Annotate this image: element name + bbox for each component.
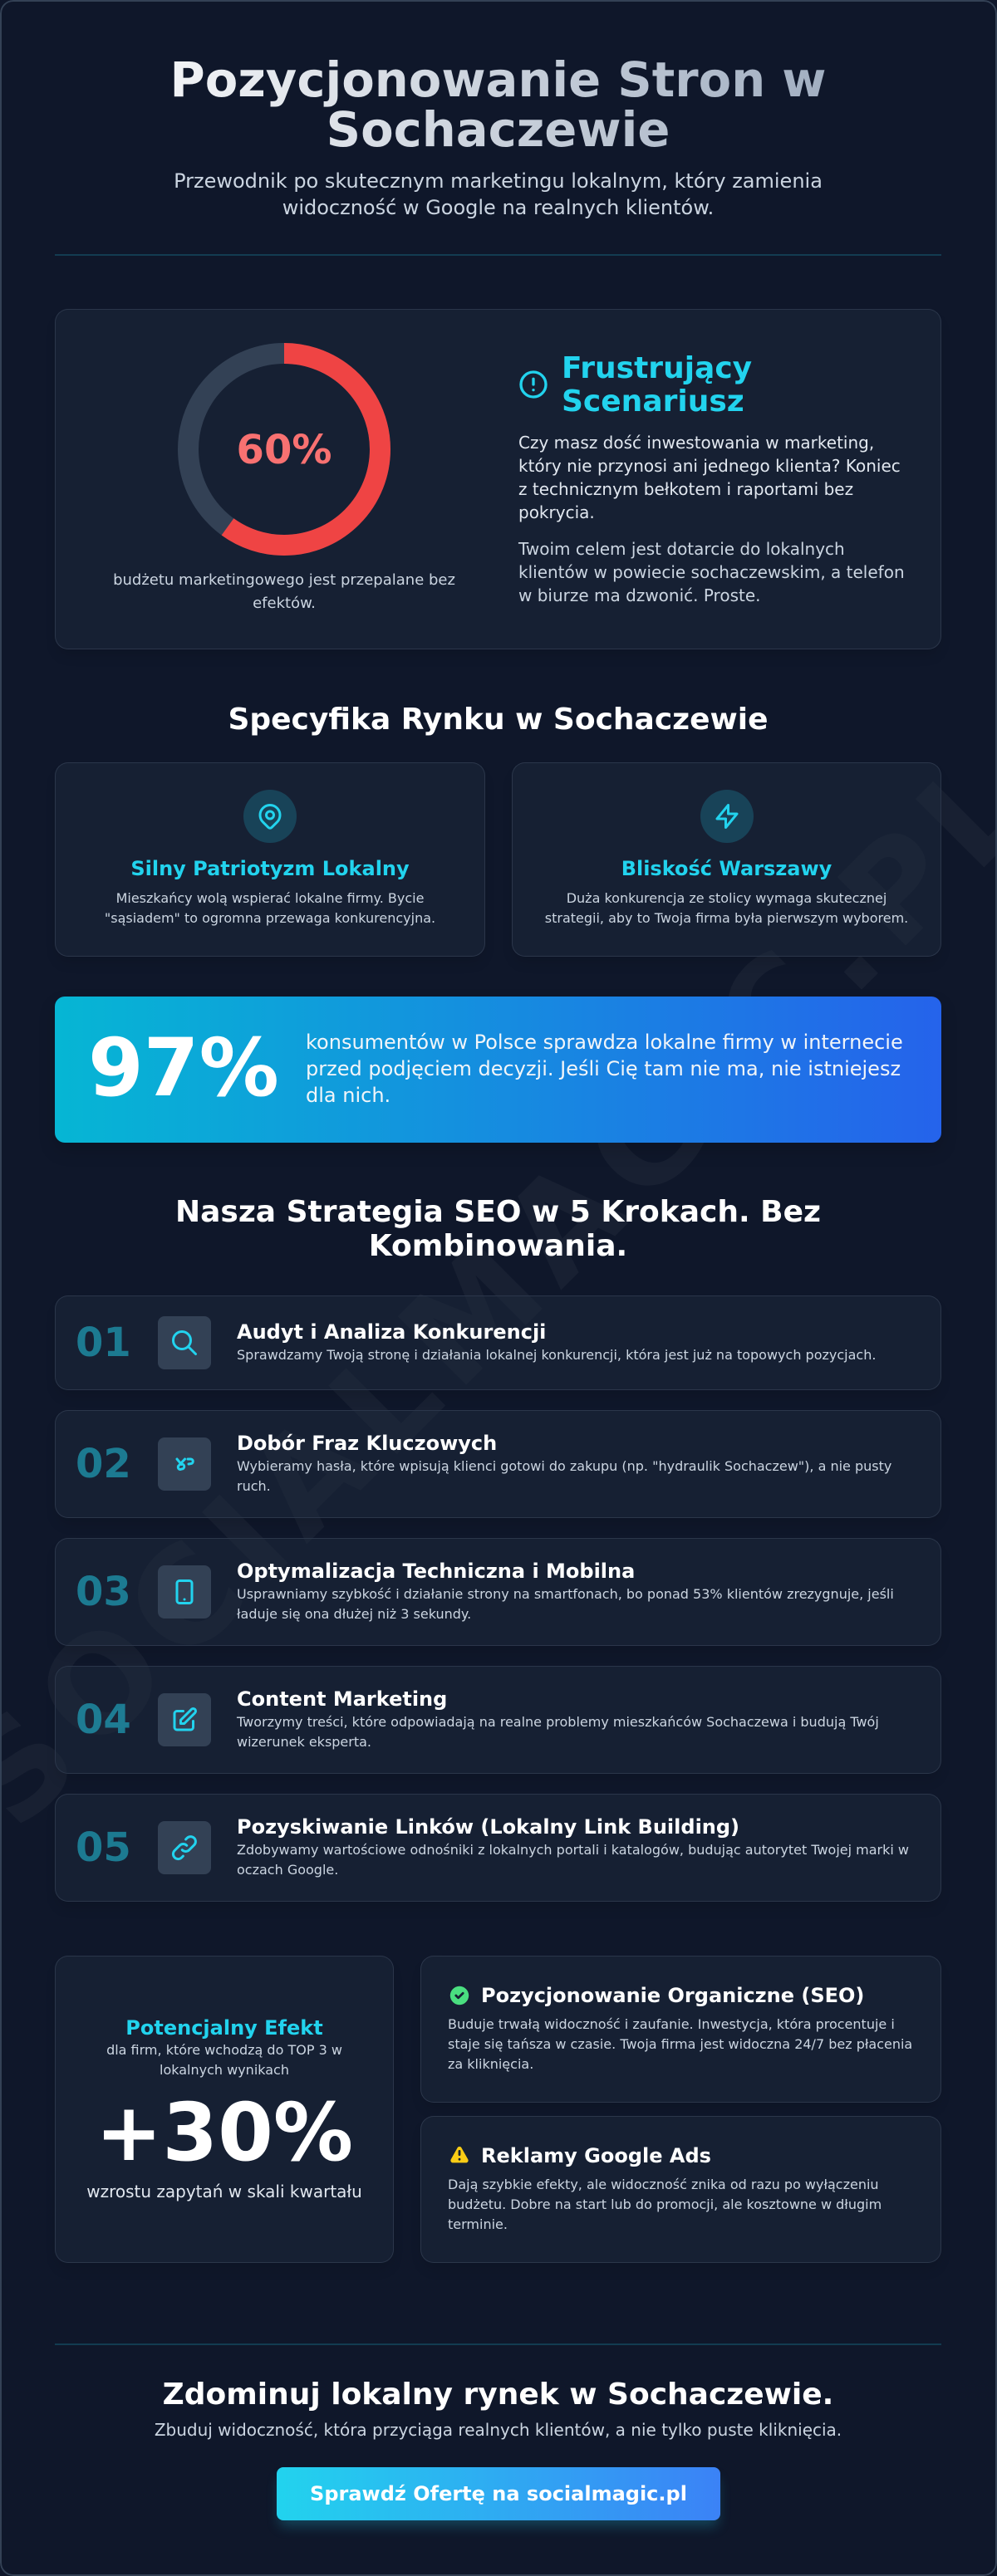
icon: mobile device — [158, 1565, 211, 1619]
paragraph one: który nie przynosi ani jednego klienta? Koniec — [518, 456, 901, 476]
subtitle: widoczność w Google na realnych klientów. — [282, 196, 714, 219]
step text: Wybieramy hasła, które wpisują klienci gotowi do zakupu (np. "hydraulik Sochaczew"), a nie pusty — [237, 1458, 891, 1474]
step text — [237, 1842, 909, 1878]
paragraph two: klientów w powiecie sochaczewskim, a telefon — [518, 562, 905, 582]
effect subtitle: dla firm, które wchodzą do TOP 3 w — [106, 2042, 342, 2058]
step text — [236, 1714, 879, 1750]
step 01 — [55, 1295, 941, 1390]
title: Pozycjonowanie Stron w — [169, 52, 827, 108]
donut caption — [113, 571, 455, 612]
card text: Dają szybkie efekty, ale widoczność znika od razu po wyłączeniu — [448, 2177, 879, 2192]
subtitle — [174, 169, 823, 219]
step number: 05 — [76, 1824, 131, 1871]
big stat: 97% — [88, 1021, 279, 1114]
title: Sochaczewie — [327, 102, 670, 158]
panel: potential effect — [55, 1956, 394, 2263]
call to action button: Sprawdź Ofertę na socialmagic.pl — [310, 2482, 687, 2505]
heading: frustrating scenario — [562, 351, 752, 419]
card text — [545, 890, 908, 926]
donut chart: 60% — [178, 343, 390, 556]
step title: Content Marketing — [237, 1687, 447, 1711]
step text: oczach Google. — [237, 1862, 338, 1878]
divider — [55, 2343, 941, 2345]
panel: organic SEO — [420, 1956, 941, 2103]
paragraph two — [518, 539, 905, 605]
panel: proximity to Warsaw — [512, 762, 941, 957]
banner text: przed podjęciem decyzji. Jeśli Cię tam nie ma, nie istniejesz — [306, 1057, 901, 1080]
step 04 — [55, 1666, 941, 1774]
step 03 — [55, 1538, 941, 1646]
step number: 04 — [76, 1697, 131, 1743]
footer subtitle: Zbuduj widoczność, która przyciąga realnych klientów, a nie tylko puste kliknięcia. — [155, 2420, 842, 2440]
effect subtitle — [106, 2042, 342, 2078]
card title: Reklamy Google Ads — [481, 2144, 711, 2167]
icon: branching key — [158, 1437, 211, 1491]
divider — [55, 254, 941, 256]
card text: budżetu. Dobre na start lub do promocji, ale kosztowne w długim — [448, 2196, 882, 2212]
step text: wizerunek eksperta. — [237, 1734, 371, 1750]
step title: Pozyskiwanie Linków (Lokalny Link Building) — [237, 1815, 739, 1839]
big stat +30%: +30% — [96, 2086, 353, 2179]
paragraph one: z technicznym bełkotem i raportami bez — [518, 479, 853, 499]
icon: search — [158, 1316, 211, 1369]
icon: link — [158, 1821, 211, 1874]
icon: exclamation circle — [519, 370, 548, 399]
heading: frustrating scenario: Scenariusz — [562, 384, 744, 419]
call to action button — [277, 2467, 720, 2520]
heading: strategy: Nasza Strategia SEO w 5 Krokach. Bez — [175, 1195, 821, 1229]
card title: Silny Patriotyzm Lokalny — [130, 857, 410, 880]
banner text: dla nich. — [306, 1084, 390, 1107]
step text: Zdobywamy wartościowe odnośniki z lokalnych portali i katalogów, budując autorytet Twojej marki w — [237, 1842, 909, 1858]
card text: Mieszkańcy wolą wspierać lokalne firmy. Bycie — [116, 890, 424, 906]
step title: Optymalizacja Techniczna i Mobilna — [237, 1560, 635, 1583]
heading: market specifics: Specyfika Rynku w Sochaczewie — [228, 703, 769, 737]
step text — [237, 1458, 891, 1494]
icon: location pin — [243, 790, 297, 843]
step number: 03 — [76, 1569, 131, 1615]
card text — [105, 890, 435, 926]
step number: 01 — [76, 1320, 131, 1366]
step text: ruch. — [237, 1478, 271, 1494]
paragraph one: Czy masz dość inwestowania w marketing, — [518, 433, 874, 453]
donut caption: budżetu marketingowego jest przepalane bez — [113, 571, 455, 589]
card title: Pozycjonowanie Organiczne (SEO) — [481, 1984, 864, 2007]
banner text — [306, 1031, 903, 1107]
step number: 02 — [76, 1441, 131, 1487]
card text — [448, 2177, 882, 2232]
subtitle: Przewodnik po skutecznym marketingu lokalnym, który zamienia — [174, 169, 823, 193]
banner text: konsumentów w Polsce sprawdza lokalne firmy w internecie — [306, 1031, 903, 1054]
paragraph one — [518, 433, 901, 522]
heading: strategy: Kombinowania. — [369, 1229, 627, 1263]
title — [55, 56, 941, 155]
step title: Audyt i Analiza Konkurencji — [237, 1320, 546, 1344]
step 05 — [55, 1794, 941, 1902]
step 02 — [55, 1410, 941, 1518]
card text: Duża konkurencja ze stolicy wymaga skutecznej — [567, 890, 886, 906]
heading: strategy — [175, 1195, 821, 1263]
donut caption: efektów. — [253, 595, 316, 612]
paragraph two: w biurze ma dzwonić. Proste. — [518, 585, 761, 605]
step text: Usprawniamy szybkość i działanie strony na smartfonach, bo ponad 53% klientów zrezygnuje, jeśli — [237, 1586, 894, 1602]
card title: Bliskość Warszawy — [621, 857, 832, 880]
footer heading: Zdominuj lokalny rynek w Sochaczewie. — [163, 2378, 833, 2412]
heading: frustrating scenario: Frustrujący — [562, 351, 752, 385]
icon: lightning bolt — [700, 790, 754, 843]
card text: strategii, aby to Twoja firma była pierwszym wyborem. — [545, 910, 908, 926]
icon: pencil — [158, 1693, 211, 1746]
banner: 97% — [55, 997, 941, 1143]
panel: frustrating scenario — [55, 309, 941, 649]
card text: terminie. — [448, 2216, 508, 2232]
icon: yellow warning — [450, 2146, 469, 2162]
card text: "sąsiadem" to ogromna przewaga konkurencyjna. — [105, 910, 435, 926]
donut chart: 60%: 60% — [237, 427, 332, 473]
card text: staje się tańsza w czasie. Twoja firma jest widoczna 24/7 bez płacenia — [448, 2036, 912, 2052]
step text: Tworzymy treści, które odpowiadają na realne problemy mieszkańców Sochaczewa i budują Twój — [237, 1714, 879, 1730]
card text: Buduje trwałą widoczność i zaufanie. Inwestycja, która procentuje i — [448, 2016, 895, 2032]
paragraph two: Twoim celem jest dotarcie do lokalnych — [518, 539, 845, 559]
icon: green check — [450, 1986, 469, 2005]
step title: Dobór Fraz Kluczowych — [237, 1432, 497, 1455]
effect subtitle: lokalnych wynikach — [160, 2062, 289, 2078]
step text — [237, 1586, 894, 1622]
panel: local patriotism — [55, 762, 485, 957]
card text: za kliknięcia. — [448, 2056, 533, 2072]
effect title: Potencjalny Efekt — [125, 2016, 323, 2040]
step text: ładuje się ona dłużej niż 3 sekundy. — [237, 1606, 471, 1622]
panel: Google Ads — [420, 2116, 941, 2263]
effect caption: wzrostu zapytań w skali kwartału — [86, 2182, 362, 2201]
card text — [448, 2016, 912, 2072]
paragraph one: pokrycia. — [518, 502, 595, 522]
step text: Sprawdzamy Twoją stronę i działania lokalnej konkurencji, która jest już na topowych pozycjach. — [237, 1347, 876, 1363]
